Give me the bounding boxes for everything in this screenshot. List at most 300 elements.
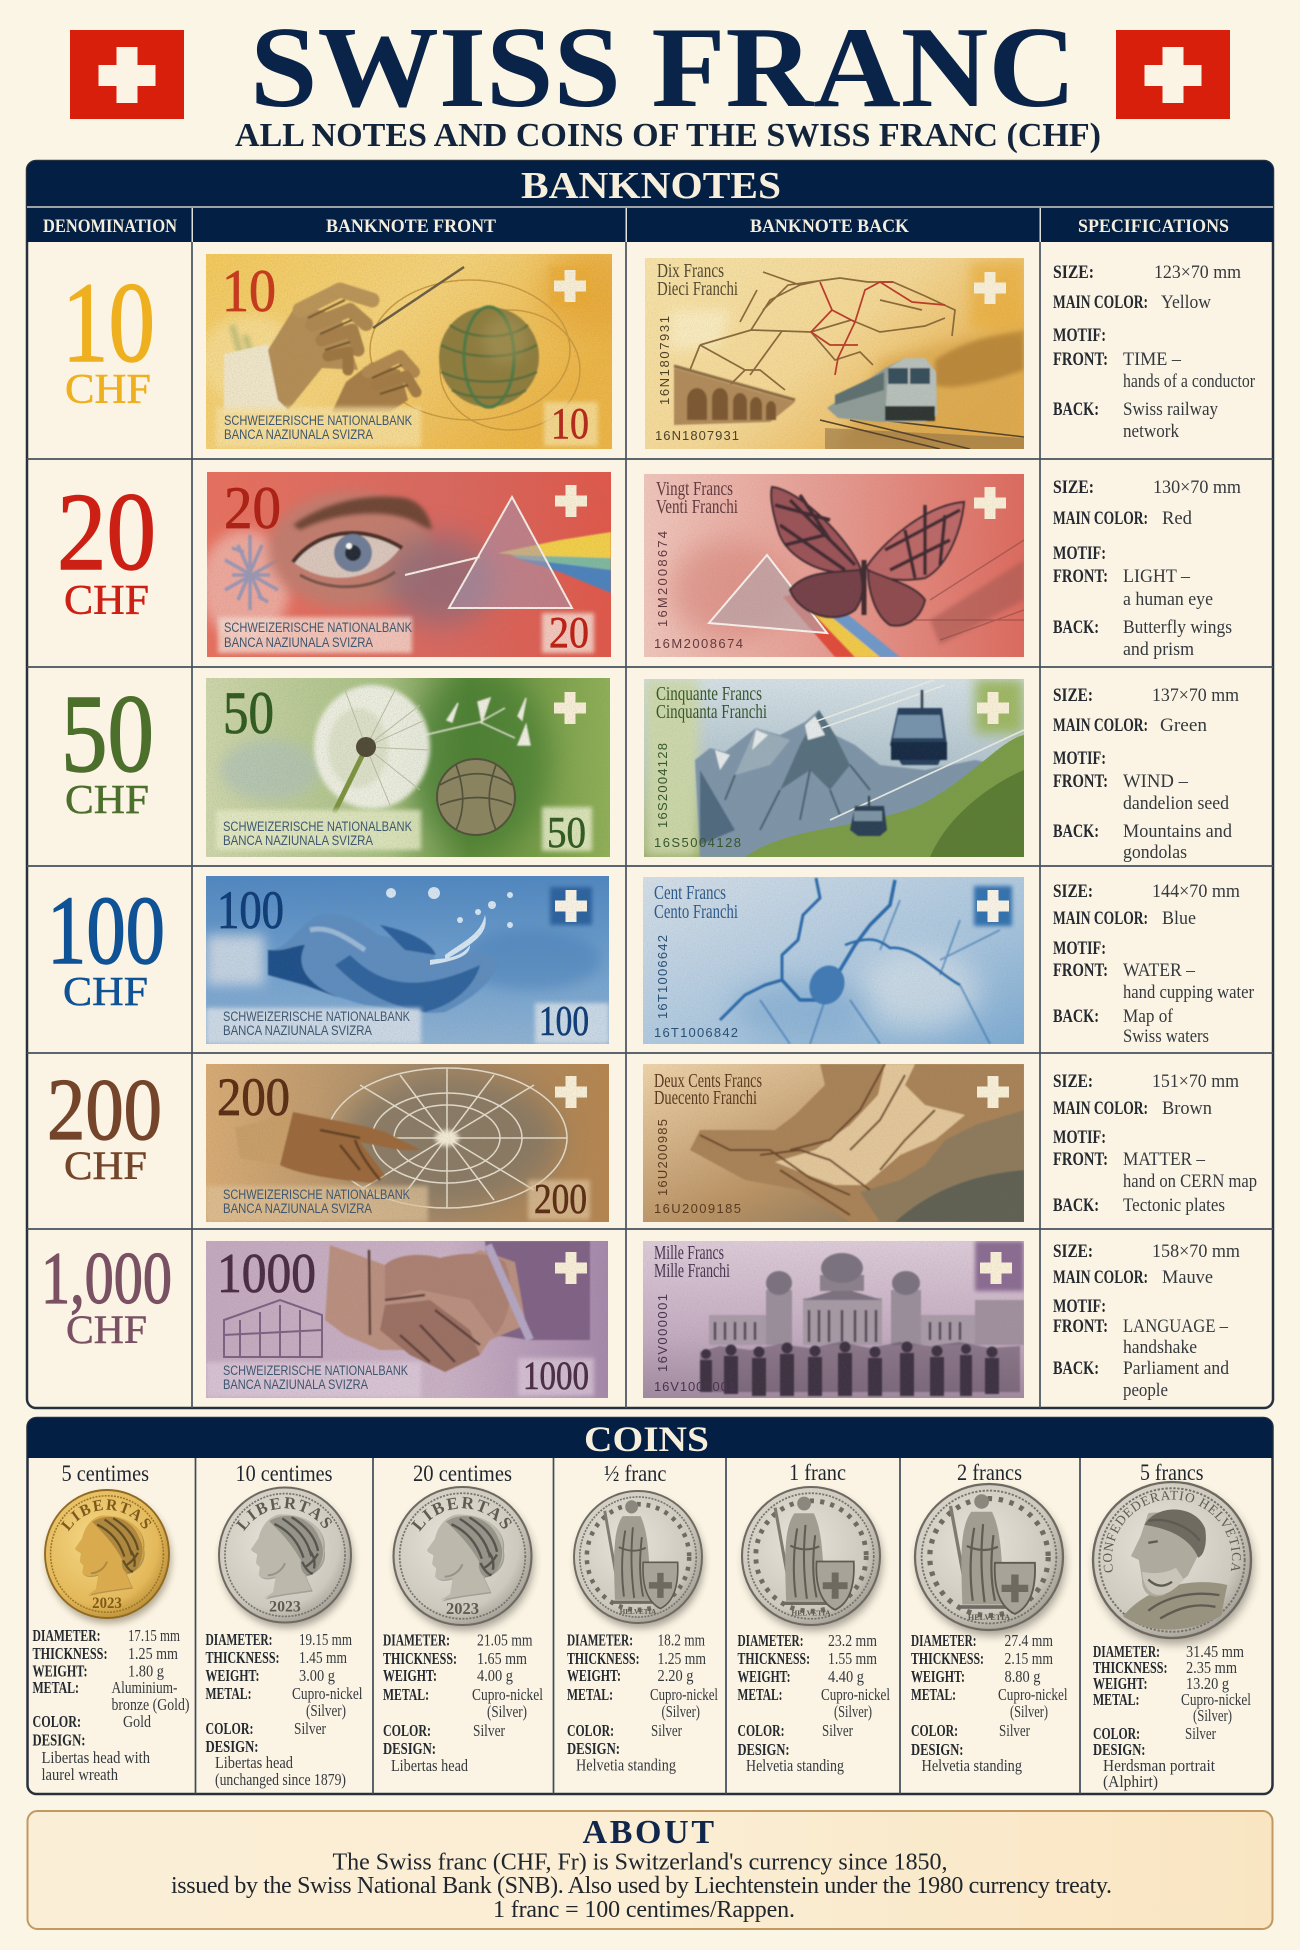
numeral: 1000 bbox=[217, 1243, 316, 1305]
specifications: 20 CHF: FRONT: bbox=[1053, 566, 1108, 587]
serial horizontal: 16N1807931 bbox=[655, 428, 740, 443]
panel: about bbox=[28, 1811, 1272, 1929]
face skin bbox=[268, 492, 432, 608]
denomination: 1,000 CHF bbox=[41, 1238, 172, 1352]
coin column: 1 franc: Cupro-nickel bbox=[821, 1685, 890, 1704]
note title: Cento Franchi bbox=[654, 902, 738, 923]
numeral: 200 bbox=[217, 1067, 290, 1127]
specifications: 10 CHF: TIME – bbox=[1123, 349, 1181, 370]
bank name: SCHWEIZERISCHE NATIONALBANK bbox=[223, 1009, 410, 1024]
icon: cross bbox=[555, 485, 587, 517]
icon: light beam bbox=[405, 557, 480, 575]
coin column: half franc: Silver bbox=[651, 1721, 682, 1740]
serial vertical: 16T1006642 bbox=[655, 934, 670, 1019]
coin column: half franc: 18.2 mm bbox=[658, 1630, 705, 1650]
tectonic strata bbox=[690, 1064, 1024, 1222]
coin column: 1 franc: 23.2 mm bbox=[828, 1631, 877, 1650]
coin column: 2 francs: Silver bbox=[999, 1721, 1030, 1740]
coin image: Helvetia bbox=[915, 1484, 1065, 1636]
coin column: half franc: DESIGN: bbox=[567, 1739, 620, 1758]
specifications: 200 CHF: MAIN COLOR: bbox=[1053, 1098, 1148, 1119]
coin image: silver Libertas: 2023 bbox=[446, 1599, 479, 1618]
banknote: 200 front bbox=[206, 1064, 609, 1223]
serial vertical: 16U200985 bbox=[655, 1118, 670, 1196]
icon: cupped hand bbox=[268, 914, 498, 1013]
specifications: 1000 CHF: people bbox=[1123, 1380, 1168, 1401]
table header row bbox=[27, 206, 1273, 242]
coin column: 2 francs bbox=[911, 1460, 1068, 1775]
coin column: half franc: THICKNESS: bbox=[567, 1649, 640, 1668]
note title: Vingt Francs bbox=[656, 479, 733, 500]
coin column: half franc bbox=[567, 1461, 718, 1774]
denomination: 1,000 CHF: 1,000 bbox=[41, 1238, 172, 1320]
flag: left bbox=[70, 30, 184, 119]
icon: cross bbox=[977, 1076, 1009, 1108]
rail network map bbox=[690, 272, 955, 390]
serial vertical: 16M2008674 bbox=[655, 530, 670, 627]
specifications: 50 CHF bbox=[1053, 685, 1239, 863]
denomination: 20 CHF: CHF bbox=[64, 578, 149, 624]
specifications: 100 CHF: MAIN COLOR: bbox=[1053, 908, 1148, 929]
specifications: 200 CHF: BACK: bbox=[1053, 1195, 1099, 1216]
serial vertical: 16S2004128 bbox=[655, 742, 670, 828]
icon: butterfly bbox=[771, 487, 964, 626]
coin column: 5 centimes: METAL: bbox=[32, 1678, 79, 1697]
bank name bbox=[223, 1363, 408, 1392]
coin column: 1 franc: 4.40 g bbox=[828, 1667, 864, 1686]
coin column: 5 centimes: 5 centimes bbox=[62, 1461, 149, 1486]
specifications: 100 CHF: BACK: bbox=[1053, 1006, 1099, 1027]
specifications: 20 CHF: Butterfly wings bbox=[1123, 617, 1232, 638]
coin column: 20 centimes: 1.65 mm bbox=[477, 1649, 527, 1668]
coin column: 10 centimes: (Silver) bbox=[306, 1701, 346, 1720]
icon: cross bbox=[555, 1076, 587, 1108]
denomination: 10 CHF bbox=[62, 259, 155, 413]
note title: Duecento Franchi bbox=[654, 1088, 757, 1109]
coin column: half franc: Cupro-nickel bbox=[650, 1685, 718, 1704]
icon: building bbox=[224, 1300, 322, 1357]
panel: banknotes bbox=[27, 161, 1273, 1408]
icon: cross bbox=[554, 692, 586, 724]
coin column: 5 francs: (Silver) bbox=[1193, 1706, 1232, 1725]
coin column: 1 franc: 1.55 mm bbox=[828, 1649, 877, 1668]
specifications: 200 CHF: Brown bbox=[1162, 1098, 1212, 1119]
denomination: 50 CHF: CHF bbox=[65, 776, 149, 822]
serial horizontal: 16S5004128 bbox=[654, 835, 742, 850]
banknote: 100 front bbox=[206, 876, 609, 1045]
coin image: gold Libertas: 2023 bbox=[92, 1596, 122, 1612]
bank name: SCHWEIZERISCHE NATIONALBANK bbox=[224, 413, 412, 428]
specifications: 50 CHF: MOTIF: bbox=[1053, 748, 1106, 769]
coin column: half franc: DIAMETER: bbox=[567, 1630, 633, 1650]
coin column: 20 centimes: DIAMETER: bbox=[383, 1630, 450, 1650]
coin column: 20 centimes bbox=[383, 1461, 543, 1775]
serial horizontal: 16T1006842 bbox=[654, 1025, 739, 1040]
denomination: 200 CHF: 200 bbox=[47, 1062, 162, 1159]
specifications: 100 CHF: WATER – bbox=[1123, 960, 1195, 981]
icon: cross bbox=[555, 1252, 587, 1284]
specifications: 10 CHF: BACK: bbox=[1053, 399, 1099, 420]
numeral: 100 bbox=[217, 880, 284, 940]
coin column: 10 centimes: METAL: bbox=[206, 1684, 252, 1703]
icon: water splash bbox=[386, 887, 513, 965]
denomination: 100 CHF bbox=[47, 877, 165, 1014]
specifications: 1000 CHF bbox=[1053, 1241, 1240, 1401]
specifications: 100 CHF: Map of bbox=[1123, 1006, 1174, 1027]
about text: issued by the Swiss National Bank (SNB). Also used by Liechtenstein under the 1980 currency treaty. bbox=[171, 1873, 1112, 1899]
specifications: 10 CHF: Swiss railway bbox=[1123, 399, 1218, 420]
note title bbox=[656, 479, 738, 518]
specifications: 200 CHF: MATTER – bbox=[1123, 1149, 1205, 1170]
icon: crowd bbox=[700, 1342, 1020, 1396]
coin column: half franc: 1.25 mm bbox=[658, 1649, 706, 1668]
bank name: BANCA NAZIUNALA SVIZRA bbox=[223, 1023, 372, 1038]
icon: cross bbox=[974, 886, 1012, 926]
coin column: 5 centimes: 1.25 mm bbox=[128, 1644, 178, 1663]
specifications: 50 CHF: Green bbox=[1160, 715, 1207, 736]
title: SWISS FRANC bbox=[250, 4, 1076, 132]
coin column: 1 franc: THICKNESS: bbox=[738, 1649, 810, 1668]
coin column: 10 centimes: 1.45 mm bbox=[299, 1648, 347, 1667]
denomination: 1,000 CHF: CHF bbox=[66, 1307, 147, 1352]
green slope bbox=[745, 735, 1024, 857]
coin column: 5 centimes: Libertas head with bbox=[42, 1748, 150, 1767]
coin column: 5 centimes bbox=[32, 1461, 190, 1784]
specifications: 20 CHF: MAIN COLOR: bbox=[1053, 508, 1148, 529]
coin column: 5 francs: COLOR: bbox=[1093, 1724, 1140, 1743]
bank name: BANCA NAZIUNALA SVIZRA bbox=[223, 1377, 368, 1392]
denomination: 10 CHF: 10 bbox=[62, 259, 155, 386]
specifications: 100 CHF: Swiss waters bbox=[1123, 1026, 1209, 1047]
denomination: 10 CHF: CHF bbox=[65, 367, 151, 413]
denomination: 20 CHF: 20 bbox=[57, 471, 156, 594]
coin column: half franc: Helvetia standing bbox=[576, 1756, 676, 1774]
coin column: 10 centimes: (unchanged since 1879) bbox=[215, 1770, 346, 1789]
denomination: 100 CHF: 100 bbox=[47, 877, 165, 985]
coin column: 2 francs: 8.80 g bbox=[1004, 1667, 1041, 1686]
coin column: 2 francs: DIAMETER: bbox=[911, 1631, 976, 1650]
specifications: 10 CHF: network bbox=[1123, 421, 1179, 442]
icon: parliament building bbox=[709, 1253, 1024, 1345]
bank name: BANCA NAZIUNALA SVIZRA bbox=[224, 427, 373, 442]
numeral: 10 bbox=[222, 258, 276, 324]
banknote: 100 back bbox=[643, 877, 1024, 1044]
specifications: 10 CHF: MAIN COLOR: bbox=[1053, 292, 1148, 313]
coin column: 2 francs: COLOR: bbox=[911, 1721, 958, 1740]
specifications: 10 CHF: MOTIF: bbox=[1053, 325, 1106, 346]
coin column: half franc: COLOR: bbox=[567, 1721, 614, 1740]
coin column: 20 centimes: Libertas head bbox=[391, 1756, 468, 1775]
specifications: 10 CHF: Yellow bbox=[1161, 292, 1211, 313]
coin image: silver Libertas bbox=[216, 1486, 358, 1633]
icon: cross bbox=[974, 487, 1006, 519]
table header row: BANKNOTE BACK bbox=[750, 216, 909, 237]
bank name bbox=[223, 1009, 410, 1038]
specifications: 200 CHF: MOTIF: bbox=[1053, 1127, 1106, 1148]
icon: sphere bbox=[437, 759, 515, 835]
icon: sleeve right bbox=[485, 1241, 590, 1340]
panel: coins bbox=[26, 1416, 1274, 1796]
icon: baton bbox=[373, 267, 464, 328]
coin column: half franc: WEIGHT: bbox=[567, 1666, 621, 1685]
numeral: 200 bbox=[534, 1177, 587, 1223]
coin column: 1 franc bbox=[738, 1460, 890, 1775]
note title bbox=[654, 883, 738, 923]
note title: Dix Francs bbox=[657, 261, 724, 282]
coin column: 2 francs: (Silver) bbox=[1010, 1702, 1048, 1721]
serial horizontal: 16V1000001 bbox=[654, 1379, 737, 1394]
specifications: 50 CHF: FRONT: bbox=[1053, 771, 1108, 792]
bank name bbox=[224, 620, 412, 650]
coin column: 10 centimes: 19.15 mm bbox=[299, 1630, 352, 1649]
coin column: 2 francs: THICKNESS: bbox=[911, 1649, 984, 1668]
specifications: 10 CHF bbox=[1053, 262, 1256, 442]
specifications: 20 CHF: and prism bbox=[1123, 639, 1194, 660]
coin column: 5 centimes: 17.15 mm bbox=[128, 1626, 180, 1645]
table header row: SPECIFICATIONS bbox=[1078, 216, 1229, 237]
specifications: 20 CHF: 130×70 mm bbox=[1153, 477, 1241, 498]
note title: Cent Francs bbox=[654, 883, 726, 904]
coin column: 1 franc: DIAMETER: bbox=[738, 1631, 804, 1650]
specifications: 20 CHF: a human eye bbox=[1123, 589, 1213, 610]
coin column: 5 centimes: THICKNESS: bbox=[32, 1644, 108, 1663]
icon: train bbox=[827, 358, 937, 422]
coin column: 5 centimes: bronze (Gold) bbox=[112, 1695, 190, 1714]
section band: banknotes heading bbox=[27, 161, 1273, 207]
about text: The Swiss franc (CHF, Fr) is Switzerland's currency since 1850, bbox=[332, 1850, 948, 1876]
note title: Venti Franchi bbox=[656, 497, 738, 518]
specifications: 1000 CHF: SIZE: bbox=[1053, 1241, 1093, 1262]
numeral: 100 bbox=[539, 999, 589, 1045]
specifications: 1000 CHF: MOTIF: bbox=[1053, 1296, 1106, 1317]
serial horizontal: 16U2009185 bbox=[654, 1201, 742, 1216]
serial horizontal: 16M2008674 bbox=[654, 636, 744, 651]
icon: hand on map bbox=[235, 1112, 421, 1183]
specifications: 100 CHF: MOTIF: bbox=[1053, 938, 1106, 959]
coin image: Helvetia bbox=[574, 1491, 704, 1628]
specifications: 200 CHF bbox=[1053, 1071, 1257, 1216]
coin image: gold Libertas: LIBERTAS bbox=[60, 1499, 152, 1532]
icon: cross bbox=[550, 887, 592, 925]
coin column: 10 centimes: DESIGN: bbox=[206, 1737, 258, 1756]
coin image: silver Libertas: LIBERTAS bbox=[236, 1497, 332, 1532]
coin column: 20 centimes: 20 centimes bbox=[413, 1461, 512, 1486]
specifications: 10 CHF: FRONT: bbox=[1053, 349, 1108, 370]
specifications: 1000 CHF: LANGUAGE – bbox=[1123, 1316, 1228, 1337]
coin column: 1 franc: Helvetia standing bbox=[746, 1756, 844, 1775]
banknote: 1000 back bbox=[643, 1241, 1024, 1398]
coin image: gold Libertas bbox=[42, 1489, 176, 1628]
specifications: 1000 CHF: Mauve bbox=[1162, 1267, 1213, 1288]
bank name: BANCA NAZIUNALA SVIZRA bbox=[223, 833, 373, 848]
coin image: Helvetia bbox=[742, 1487, 882, 1631]
cable lines bbox=[811, 680, 1024, 820]
note title: Cinquante Francs bbox=[656, 684, 762, 705]
coin column: 1 franc: COLOR: bbox=[738, 1721, 784, 1740]
specifications: 200 CHF: FRONT: bbox=[1053, 1149, 1108, 1170]
specifications: 50 CHF: SIZE: bbox=[1053, 685, 1093, 706]
specifications: 20 CHF: MOTIF: bbox=[1053, 543, 1106, 564]
coin image: silver Libertas bbox=[390, 1486, 539, 1636]
note title bbox=[654, 1071, 762, 1109]
icon: cross bbox=[977, 692, 1009, 724]
coin column: 5 francs: 13.20 g bbox=[1186, 1674, 1229, 1693]
coin column: half franc: 2.20 g bbox=[658, 1666, 694, 1685]
coin column: 5 francs: DESIGN: bbox=[1093, 1740, 1146, 1759]
coin column: 10 centimes: Cupro-nickel bbox=[292, 1684, 363, 1703]
section band: coins heading: COINS bbox=[584, 1419, 709, 1459]
denomination: 50 CHF: 50 bbox=[61, 673, 154, 796]
coin column: 2 francs: Cupro-nickel bbox=[998, 1685, 1068, 1704]
specifications: 1000 CHF: Parliament and bbox=[1123, 1358, 1229, 1379]
coin column: 10 centimes: Libertas head bbox=[215, 1753, 293, 1772]
banknote: 20 back bbox=[644, 474, 1024, 657]
coin column: 20 centimes: THICKNESS: bbox=[383, 1649, 457, 1668]
coin column: 1 franc: Silver bbox=[822, 1721, 853, 1740]
coin column: 5 francs: THICKNESS: bbox=[1093, 1658, 1168, 1677]
coin column: 10 centimes: 10 centimes bbox=[236, 1461, 333, 1486]
coin column: 1 franc: WEIGHT: bbox=[738, 1667, 790, 1686]
banknote: 1000 front bbox=[206, 1241, 608, 1398]
coin column: 5 centimes: Gold bbox=[123, 1712, 151, 1731]
about text bbox=[171, 1850, 1112, 1923]
table header row: DENOMINATION bbox=[43, 216, 177, 237]
coin column: 20 centimes: 4.00 g bbox=[477, 1666, 513, 1685]
bank name: BANCA NAZIUNALA SVIZRA bbox=[224, 635, 373, 650]
banknote: 50 back bbox=[644, 679, 1024, 857]
coin column: 2 francs: WEIGHT: bbox=[911, 1667, 965, 1686]
note title bbox=[657, 264, 738, 295]
denomination: 200 CHF: CHF bbox=[64, 1143, 147, 1188]
bank name: SCHWEIZERISCHE NATIONALBANK bbox=[223, 819, 412, 834]
specifications: 1000 CHF: handshake bbox=[1123, 1337, 1197, 1358]
coin column: 5 centimes: DESIGN: bbox=[32, 1730, 86, 1750]
specifications: 50 CHF: MAIN COLOR: bbox=[1053, 715, 1148, 736]
numeral: 20 bbox=[549, 608, 589, 657]
specifications: 1000 CHF: BACK: bbox=[1053, 1358, 1099, 1379]
section band: coins heading bbox=[28, 1418, 1272, 1459]
note title: Mille Franchi bbox=[654, 1261, 730, 1282]
specifications: 20 CHF: Red bbox=[1162, 508, 1192, 529]
coin column: 5 francs: 2.35 mm bbox=[1186, 1658, 1237, 1677]
icon: CERN map rings bbox=[327, 1068, 567, 1208]
bank name bbox=[223, 819, 412, 848]
coin column: 2 francs: 2.15 mm bbox=[1004, 1649, 1053, 1668]
coin column: 5 centimes: 1.80 g bbox=[128, 1662, 164, 1680]
icon: dandelion bbox=[314, 685, 430, 813]
icon: mountains bbox=[695, 710, 1024, 857]
numeral: 20 bbox=[224, 475, 281, 541]
icon: conductor hand bbox=[224, 290, 416, 414]
coin image: silver Libertas: 2023 bbox=[269, 1599, 301, 1616]
specifications: 200 CHF: hand on CERN map bbox=[1123, 1171, 1257, 1192]
specifications: 50 CHF: WIND – bbox=[1123, 771, 1188, 792]
coin column: 10 centimes: DIAMETER: bbox=[206, 1630, 272, 1649]
specifications: 100 CHF: FRONT: bbox=[1053, 960, 1108, 981]
coin column: half franc: (Silver) bbox=[662, 1702, 700, 1721]
about text: 1 franc = 100 centimes/Rappen. bbox=[493, 1897, 795, 1923]
icon: handshake bbox=[325, 1245, 530, 1372]
coin column: 5 francs: 5 francs bbox=[1140, 1460, 1204, 1485]
specifications: 1000 CHF: FRONT: bbox=[1053, 1316, 1108, 1337]
coin column: 2 francs: 2 francs bbox=[957, 1460, 1022, 1485]
coin column: 10 centimes: 3.00 g bbox=[299, 1666, 335, 1685]
bank name: SCHWEIZERISCHE NATIONALBANK bbox=[223, 1187, 410, 1202]
note title: Deux Cents Francs bbox=[654, 1071, 762, 1092]
coin column: 2 francs: Helvetia standing bbox=[922, 1756, 1022, 1775]
coin column: 2 francs: 27.4 mm bbox=[1004, 1631, 1053, 1650]
about heading: ABOUT bbox=[582, 1814, 714, 1851]
bank name bbox=[223, 1187, 410, 1216]
banknote: 10 back bbox=[645, 258, 1024, 449]
coin column: 10 centimes: WEIGHT: bbox=[206, 1666, 260, 1685]
specifications: 10 CHF: hands of a conductor bbox=[1123, 371, 1256, 392]
specifications: 50 CHF: dandelion seed bbox=[1123, 793, 1229, 814]
note title bbox=[656, 684, 767, 723]
coin column: 5 francs: Silver bbox=[1185, 1724, 1216, 1743]
coin column: 20 centimes: (Silver) bbox=[487, 1702, 527, 1721]
coin column: 5 centimes: COLOR: bbox=[32, 1712, 81, 1731]
coin image: herdsman: CONFEDEDERATIO HELVETICA bbox=[1103, 1490, 1241, 1572]
coin column: 20 centimes: DESIGN: bbox=[383, 1739, 436, 1758]
coin column: 5 francs: (Alphirt) bbox=[1103, 1772, 1158, 1791]
coin column: 5 centimes: WEIGHT: bbox=[32, 1662, 88, 1680]
specifications: 100 CHF: Blue bbox=[1162, 908, 1196, 929]
bank name: SCHWEIZERISCHE NATIONALBANK bbox=[223, 1363, 408, 1378]
numeral: 50 bbox=[547, 808, 586, 857]
coin column: 5 francs bbox=[1089, 1460, 1260, 1791]
bank name: SCHWEIZERISCHE NATIONALBANK bbox=[224, 620, 412, 635]
coin image: herdsman bbox=[1089, 1480, 1260, 1650]
icon: globe bbox=[439, 307, 539, 407]
icon: rainbow bbox=[783, 590, 900, 657]
icon: snow crystal bbox=[225, 535, 278, 610]
coin column: 10 centimes: Silver bbox=[294, 1719, 326, 1738]
icon: rainbow bbox=[498, 532, 611, 593]
specifications: 200 CHF: Tectonic plates bbox=[1123, 1195, 1225, 1216]
specifications: 20 CHF: LIGHT – bbox=[1123, 566, 1190, 587]
subtitle: ALL NOTES AND COINS OF THE SWISS FRANC (CHF) bbox=[235, 117, 1101, 154]
coin column: 5 centimes: laurel wreath bbox=[42, 1765, 118, 1784]
icon: viaduct bbox=[674, 366, 795, 425]
coin column: 5 francs: Herdsman portrait bbox=[1103, 1756, 1215, 1775]
numeral: 10 bbox=[551, 399, 589, 448]
specifications: 200 CHF: 151×70 mm bbox=[1152, 1071, 1239, 1092]
coin column: 5 francs: DIAMETER: bbox=[1093, 1642, 1160, 1661]
coin column: 20 centimes: 21.05 mm bbox=[477, 1630, 532, 1650]
coin column: 5 centimes: DIAMETER: bbox=[32, 1626, 100, 1645]
coin column: 5 centimes: Aluminium- bbox=[112, 1678, 178, 1697]
bank name bbox=[224, 416, 412, 439]
icon: cross bbox=[974, 272, 1006, 304]
icon: cross bbox=[980, 1252, 1012, 1284]
specifications: 200 CHF: SIZE: bbox=[1053, 1071, 1093, 1092]
section band: banknotes heading: BANKNOTES bbox=[521, 165, 781, 207]
banknote: 50 front bbox=[206, 670, 610, 857]
denomination: 200 CHF bbox=[47, 1062, 162, 1188]
coin column: 20 centimes: Cupro-nickel bbox=[472, 1685, 543, 1704]
coin column: 20 centimes: METAL: bbox=[383, 1685, 429, 1704]
serial vertical: 16N1807931 bbox=[657, 315, 672, 405]
icon: gondola large bbox=[890, 690, 947, 765]
coin column: 20 centimes: COLOR: bbox=[383, 1721, 431, 1740]
coin column: 5 francs: Cupro-nickel bbox=[1181, 1690, 1251, 1709]
coin column: 5 francs: WEIGHT: bbox=[1093, 1674, 1148, 1693]
coin column: 5 francs: METAL: bbox=[1093, 1690, 1140, 1709]
icon: prism bbox=[709, 555, 827, 633]
note title: Cinquanta Franchi bbox=[656, 702, 767, 723]
icon: cross bbox=[554, 270, 586, 302]
